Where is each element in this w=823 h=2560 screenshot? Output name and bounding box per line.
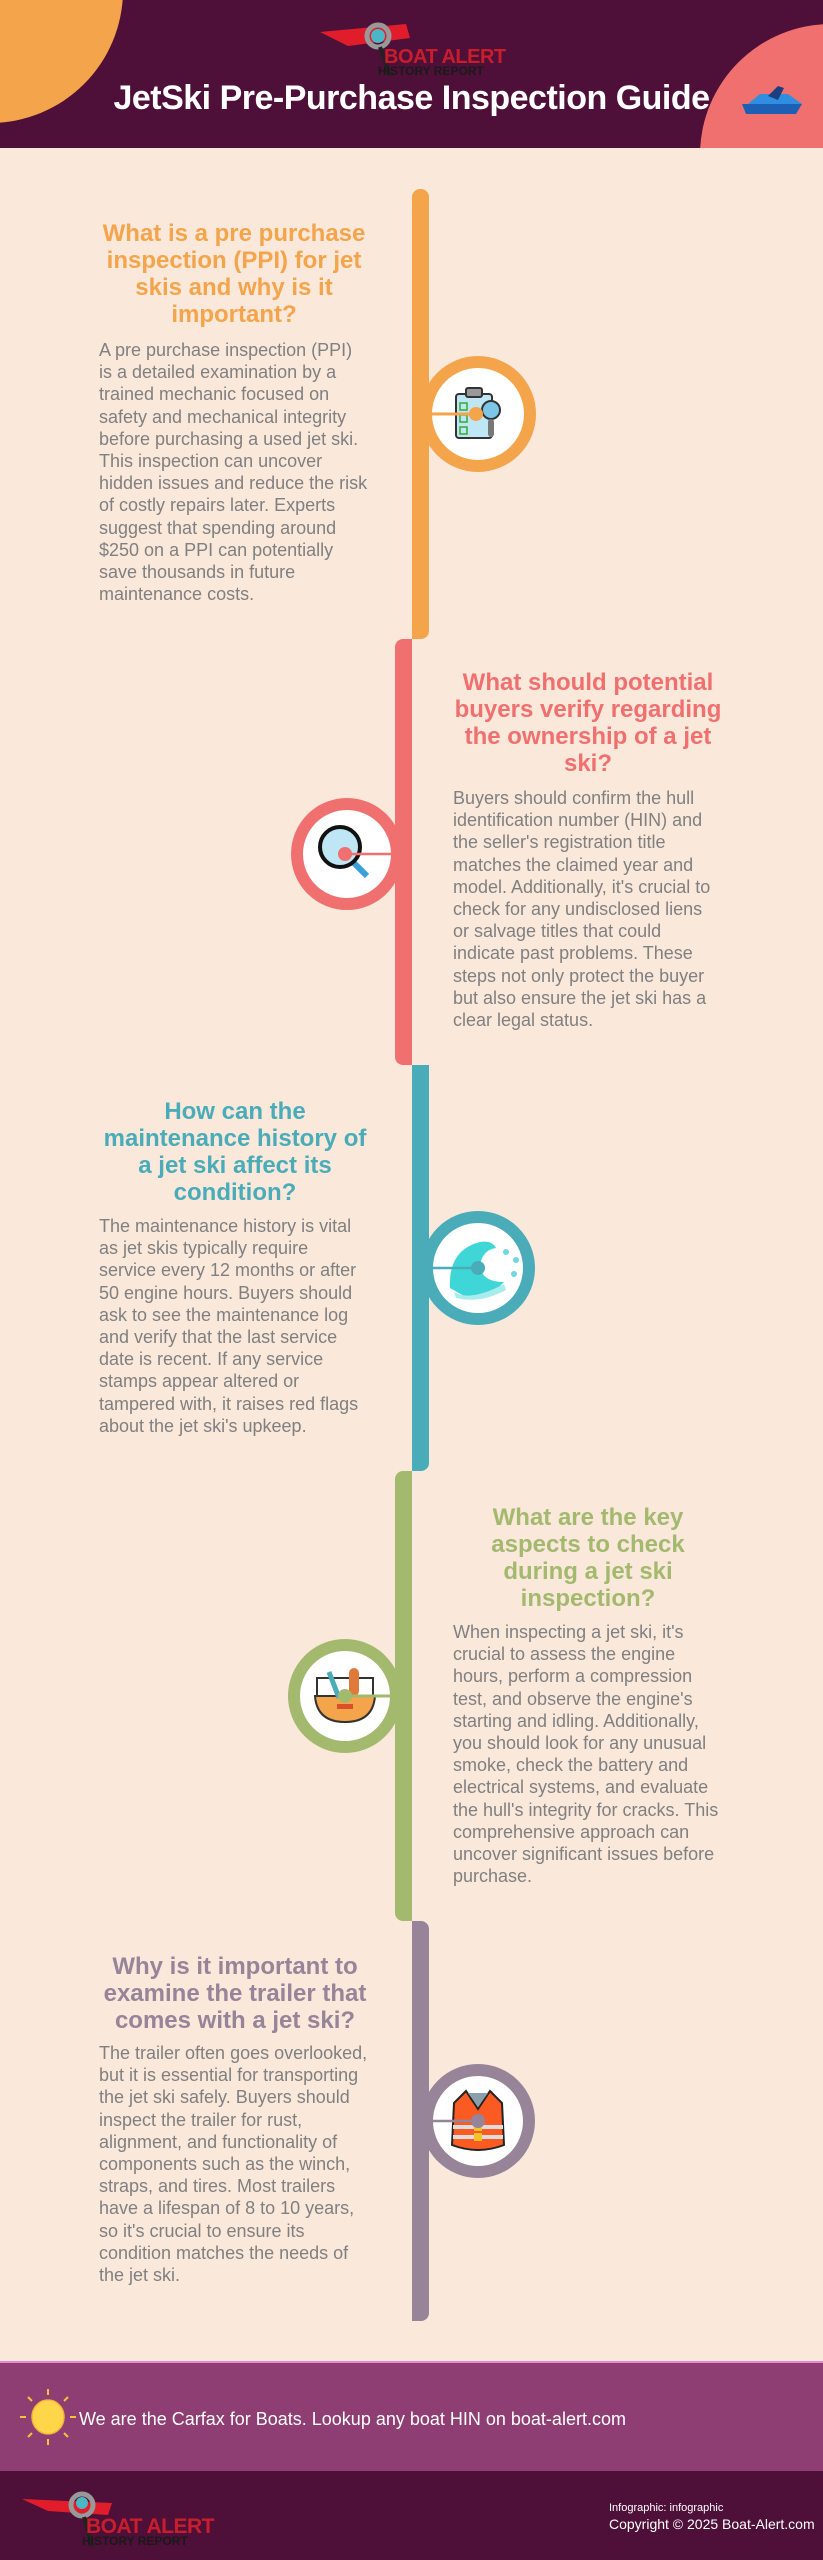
timeline bar 1 xyxy=(412,189,429,639)
logo: HISTORY REPORT xyxy=(378,64,484,78)
panel: section 4 xyxy=(453,1504,718,1886)
text: section 4: When inspecting a jet ski, it's crucial to assess the engine hours, perform a compression test, and observe the engine's starting and idling. Additionally, you should look for any unusual smoke, check the battery and electrical systems, and evaluate the hull's integrity for cracks. This comprehensive approach can uncover significant issues before purchase. xyxy=(453,1622,718,1886)
timeline bar 2 xyxy=(395,639,412,1065)
heading: section 1: What is a pre purchase inspection (PPI) for jet skis and why is it important? xyxy=(103,220,365,328)
callout band xyxy=(0,2361,823,2471)
icon: toolbox circle xyxy=(288,1639,395,1753)
text: section 3: The maintenance history is vital as jet skis typically require service every 12 months or after 50 engine hours. Buyers should ask to see the maintenance log and verify that the last service date is recent. If any service stamps appear altered or tampered with, it raises red flags about the jet ski's upkeep. xyxy=(99,1216,358,1436)
copyright: Copyright © 2025 Boat-Alert.com xyxy=(609,2516,815,2532)
text: section 2: Buyers should confirm the hull identification number (HIN) and the seller's registration title matches the claimed year and model. Additionally, it's crucial to check for any undisclosed liens or salvage titles that could indicate past problems. These steps not only protect the buyer but also ensure the jet ski has a clear legal status. xyxy=(453,788,710,1030)
panel: section 1 xyxy=(99,220,367,604)
panel: section 2 xyxy=(453,669,721,1030)
panel: section 3 xyxy=(99,1098,366,1436)
icon: sun xyxy=(20,2389,76,2445)
heading: section 3: How can the maintenance history of a jet ski affect its condition? xyxy=(104,1098,366,1206)
icon: wave circle xyxy=(429,1211,535,1325)
heading: section 5: Why is it important to examine the trailer that comes with a jet ski? xyxy=(104,1953,366,2034)
text: section 1: A pre purchase inspection (PPI) is a detailed examination by a trained mechanic focused on safety and mechanical integrity before purchasing a used jet ski. This inspection can uncover hidden issues and reduce the risk of costly repairs later. Experts suggest that spending around $250 on a PPI can potentially save thousands in future maintenance costs. xyxy=(99,340,367,604)
icon: magnifier circle xyxy=(291,798,395,910)
footer logo xyxy=(22,2492,214,2548)
header xyxy=(0,0,823,148)
heading: section 2: What should potential buyers verify regarding the ownership of a jet ski? xyxy=(455,669,721,777)
decorative pink circle xyxy=(700,24,823,286)
footer logo: BOAT ALERT xyxy=(86,2515,214,2538)
icon: clipboard circle xyxy=(429,356,536,472)
logo: BOAT ALERT xyxy=(384,46,506,68)
icon: life vest circle xyxy=(429,2064,535,2178)
heading: section 4: What are the key aspects to check during a jet ski inspection? xyxy=(491,1504,685,1612)
copyright: Infographic: infographic xyxy=(609,2502,723,2514)
timeline bar 4 xyxy=(395,1471,412,1921)
panel: section 5 xyxy=(99,1953,367,2285)
title: JetSki Pre-Purchase Inspection Guide xyxy=(113,79,710,117)
icon: jet ski xyxy=(742,86,802,114)
timeline bar 5 xyxy=(412,1921,429,2321)
decorative orange circle xyxy=(0,0,123,123)
copyright xyxy=(609,2502,815,2532)
timeline bar 3 xyxy=(412,1065,429,1471)
footer xyxy=(0,2471,823,2560)
footer logo: HISTORY REPORT xyxy=(82,2534,188,2548)
callout text: We are the Carfax for Boats. Lookup any boat HIN on boat-alert.com xyxy=(79,2409,626,2429)
logo xyxy=(320,22,506,78)
text: section 5: The trailer often goes overlooked, but it is essential for transporting the jet ski safely. Buyers should inspect the trailer for rust, alignment, and functionality of components such as the winch, straps, and tires. Most trailers have a lifespan of 8 to 10 years, so it's crucial to ensure its condition matches the needs of the jet ski. xyxy=(99,2043,367,2285)
